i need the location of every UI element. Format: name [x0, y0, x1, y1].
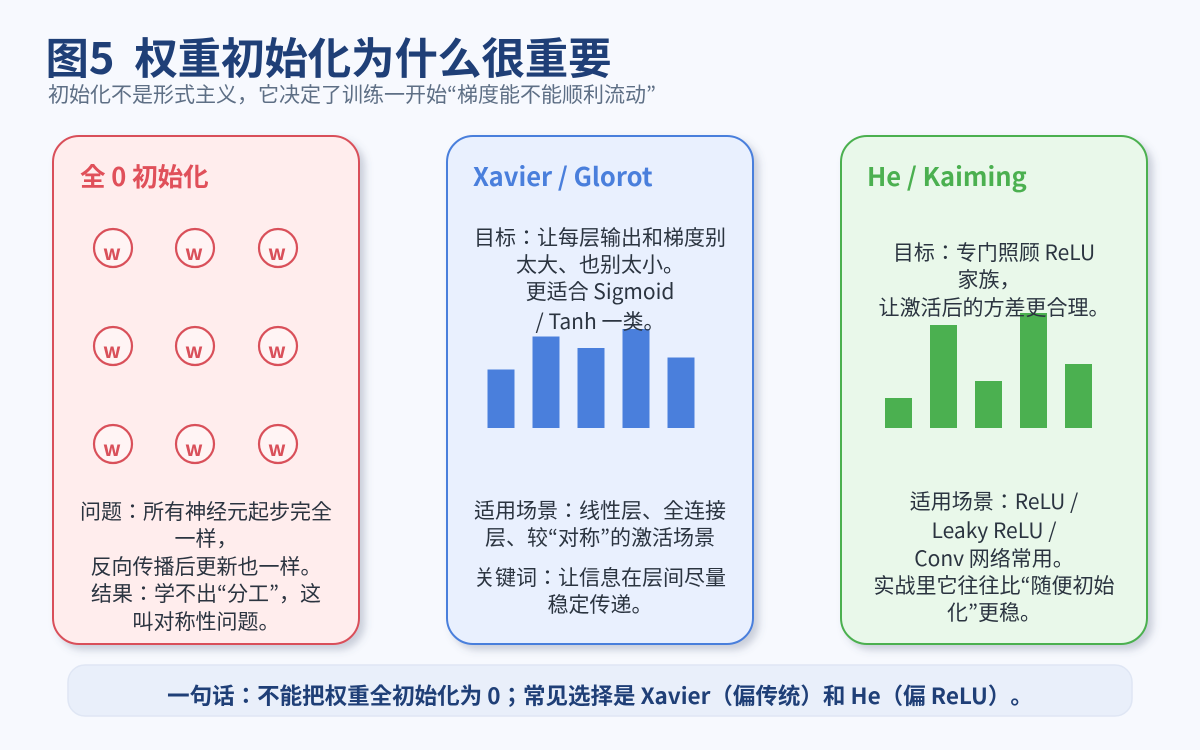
problem text: 问题：所有神经元起步完全: [80, 496, 332, 526]
goal text: [878, 237, 1110, 322]
usage text: 层、较“对称”的激活场景: [485, 522, 715, 552]
weight node grid: w: [185, 334, 203, 364]
weight node grid: [94, 229, 297, 463]
weight node grid: w: [268, 432, 286, 462]
problem text: 结果：学不出“分工”，这: [91, 578, 321, 608]
usage text: 实战里它往往比“随便初始: [874, 570, 1114, 600]
keyword text: [474, 562, 726, 619]
bar chart: Xavier: [488, 329, 694, 428]
goal text: 目标：专门照顾 ReLU: [893, 237, 1095, 267]
problem text: 一样，: [174, 523, 238, 553]
usage text: Conv 网络常用。: [914, 543, 1074, 573]
summary bar: [68, 665, 1132, 716]
problem text: 叫对称性问题。: [132, 606, 280, 636]
goal text: / Tanh 一类。: [536, 306, 664, 336]
weight node grid: w: [185, 236, 203, 266]
bar chart: He: [885, 313, 1092, 428]
usage text: [474, 495, 726, 552]
panel: all-zero initialization: [53, 136, 359, 644]
weight node grid: w: [103, 334, 121, 364]
usage text: 适用场景：ReLU /: [910, 486, 1078, 516]
panel heading: He: He / Kaiming: [867, 157, 1027, 194]
title: 图5 权重初始化为什么很重要: [46, 25, 612, 87]
goal text: 目标：让每层输出和梯度别: [474, 222, 726, 252]
goal text: [474, 222, 726, 336]
goal text: 太大、也别太小。: [516, 249, 684, 279]
usage text: Leaky ReLU /: [931, 515, 1057, 545]
weight node grid: w: [185, 432, 203, 462]
summary bar: 一句话：不能把权重全初始化为 0；常见选择是 Xavier（偏传统）和 He（偏 ReLU）。: [167, 679, 1033, 711]
problem text: [80, 496, 332, 636]
weight node grid: w: [103, 432, 121, 462]
goal text: 家族，: [958, 264, 1020, 294]
panel heading: Xavier: Xavier / Glorot: [473, 157, 653, 194]
usage text: [874, 486, 1114, 627]
weight node grid: w: [103, 236, 121, 266]
goal text: 更适合 Sigmoid: [526, 276, 674, 306]
goal text: 让激活后的方差更合理。: [878, 292, 1110, 322]
panel: He / Kaiming: [841, 136, 1147, 644]
problem text: 反向传播后更新也一样。: [90, 551, 322, 581]
weight node grid: w: [268, 334, 286, 364]
subtitle: 初始化不是形式主义，它决定了训练一开始“梯度能不能顺利流动”: [48, 79, 656, 109]
panel: Xavier / Glorot: [447, 136, 753, 644]
usage text: 适用场景：线性层、全连接: [474, 495, 726, 525]
usage text: 化”更稳。: [947, 597, 1041, 627]
keyword text: 稳定传递。: [548, 589, 652, 619]
panel heading: all-zero: 全 0 初始化: [80, 157, 209, 194]
weight node grid: w: [268, 236, 286, 266]
keyword text: 关键词：让信息在层间尽量: [474, 562, 726, 592]
